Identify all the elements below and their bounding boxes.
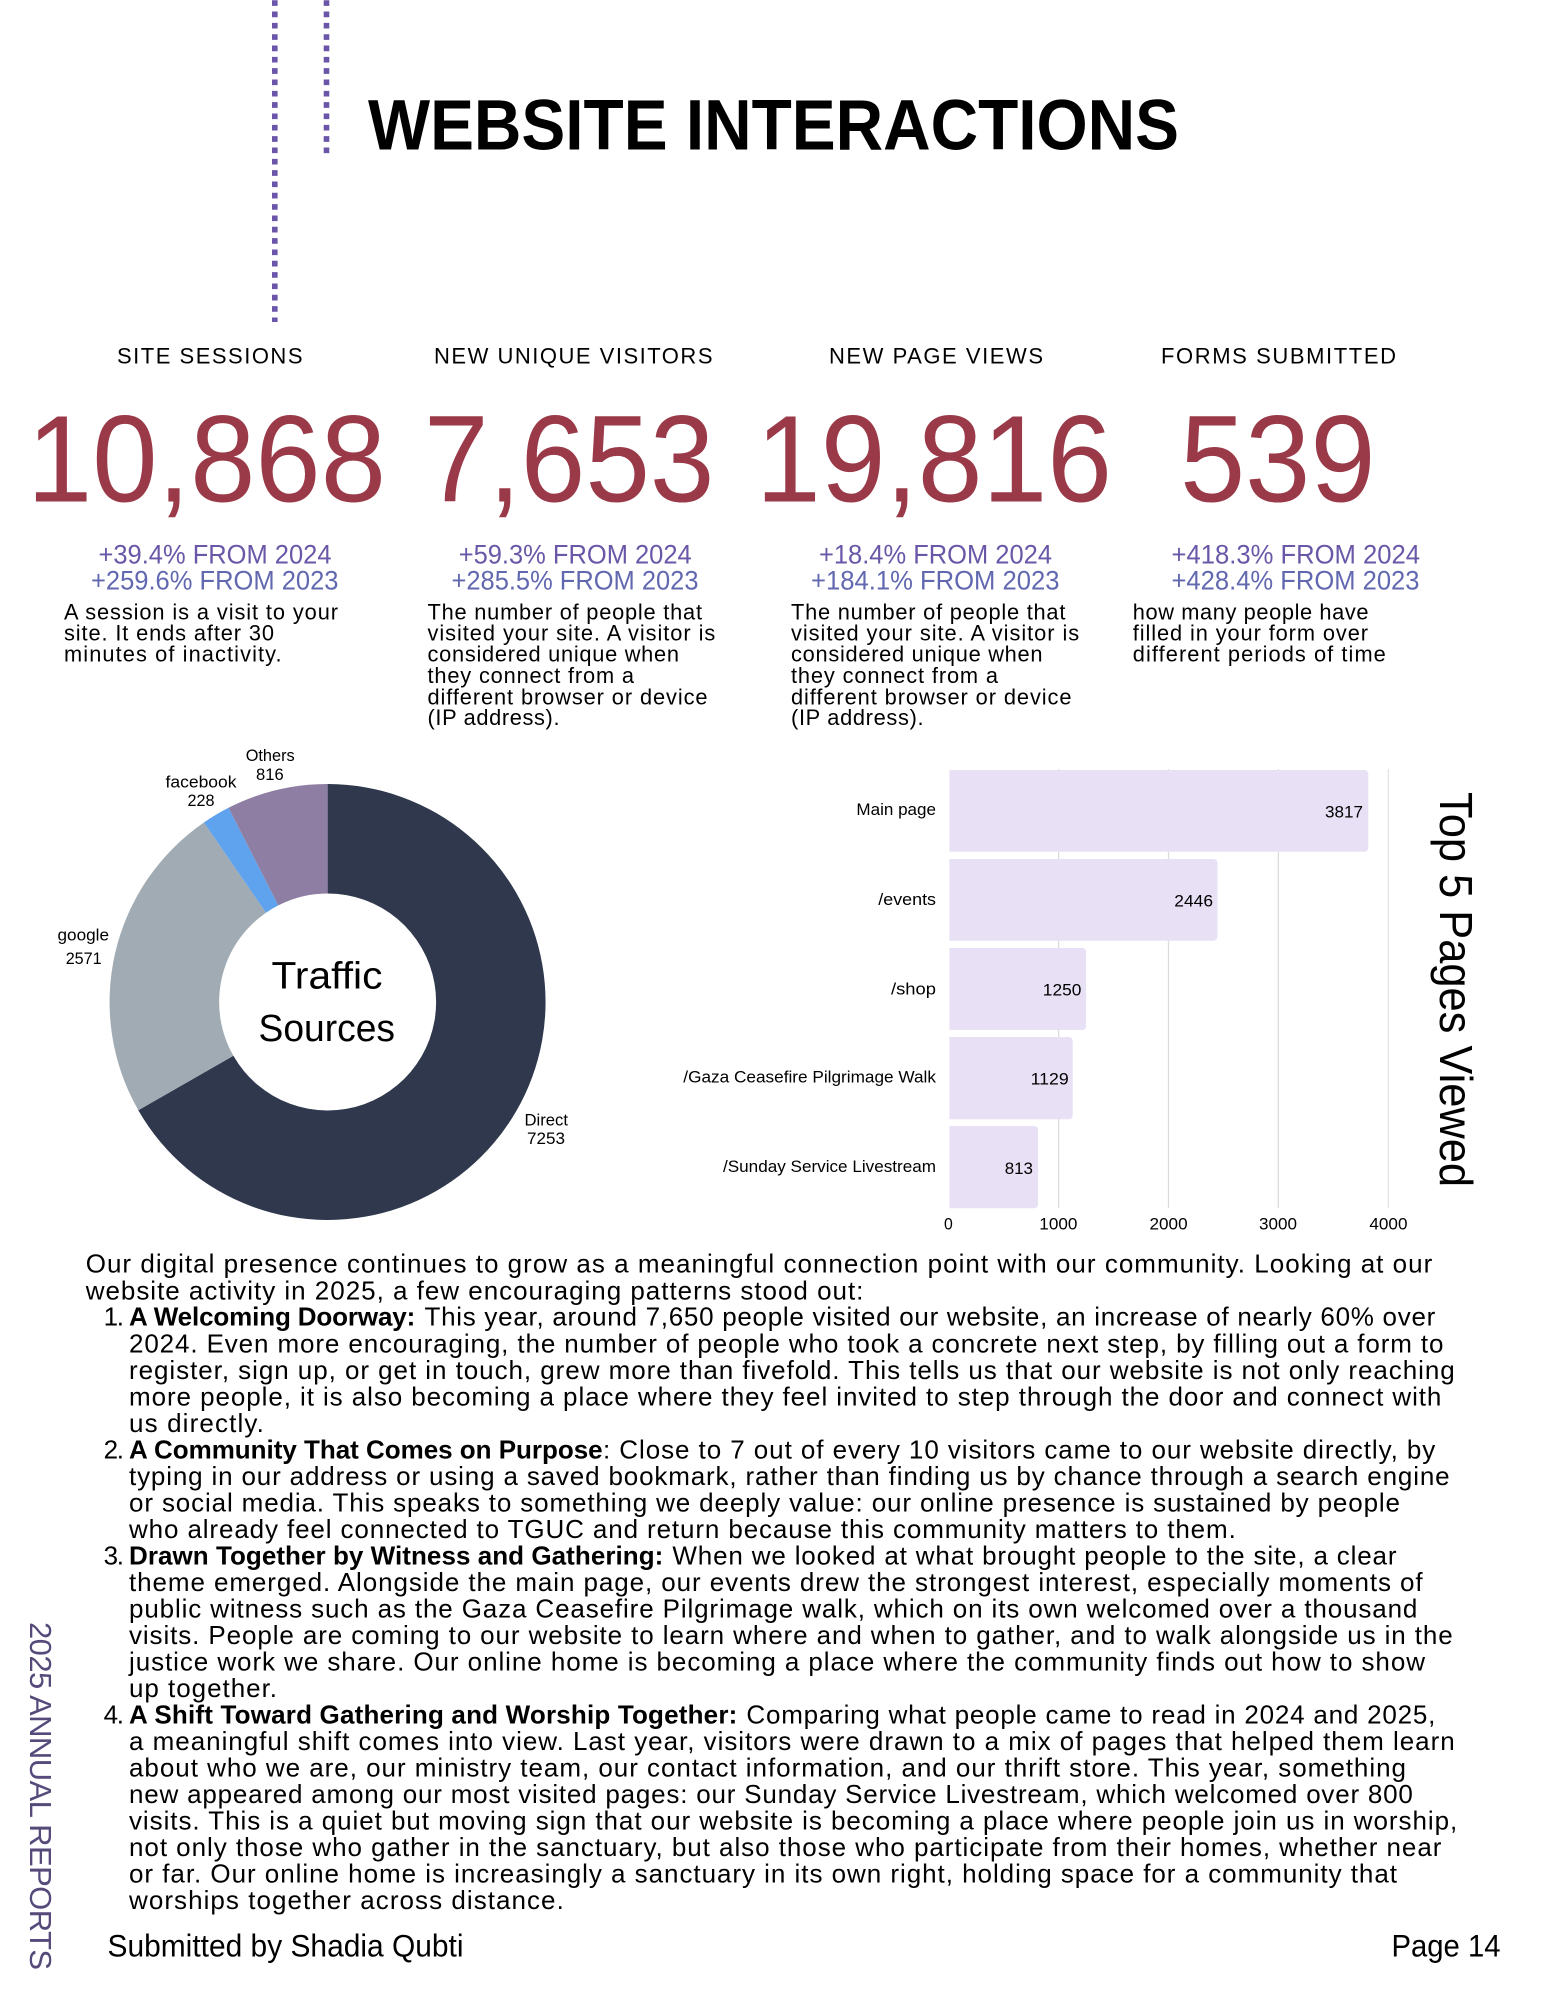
donut centre title: Sources	[258, 1008, 395, 1050]
side label: rotated report title: 2025 ANNUAL REPORTS	[23, 1622, 58, 1970]
description: A session is a visit to your	[64, 600, 338, 624]
list item 2: typing in our address or using a saved bookmark, rather than finding us by chance through a search engine	[129, 1461, 1450, 1491]
list item 3: visits. People are coming to our website to learn where and when to gather, and to walk alongside us in the	[129, 1620, 1453, 1650]
description: considered unique when	[791, 642, 1042, 667]
description	[428, 600, 715, 730]
list item 4: worships together across distance.	[128, 1885, 564, 1915]
list item 1	[104, 1302, 1455, 1438]
list item 1: more people, it is also becoming a place where they feel invited to step through the door and connect with	[129, 1381, 1441, 1411]
label: google: google	[58, 926, 109, 945]
category labels: Main page	[856, 800, 936, 819]
label: Others: Others	[246, 746, 295, 765]
slices	[110, 784, 546, 1220]
list item 4: not only those who gather in the sanctuary, but also those who participate from their homes, whether near	[129, 1832, 1442, 1862]
description: minutes of inactivity.	[64, 642, 282, 667]
list item 3	[104, 1540, 1453, 1703]
x axis labels: 3000	[1259, 1214, 1297, 1233]
label: facebook	[166, 772, 237, 810]
donut centre title	[258, 955, 395, 1050]
change from 2023: +259.6% FROM 2023	[91, 565, 338, 595]
list item 1: 1.	[104, 1302, 124, 1332]
description: different browser or device	[791, 684, 1072, 709]
description: site. It ends after 30	[64, 620, 274, 646]
list item 4	[104, 1699, 1457, 1915]
bar values: 1250	[1043, 981, 1081, 1000]
bar values: 3817	[1325, 803, 1363, 822]
list item 4: or far. Our online home is increasingly a sanctuary in its own right, holding space for a community that	[129, 1858, 1398, 1888]
list item 2: : Close to 7 out of every 10 visitors came to our website directly, by	[603, 1434, 1435, 1464]
footer: submitted by: Submitted by Shadia Qubti	[108, 1927, 464, 1963]
list item 3: When we looked at what brought people to the site, a clear	[672, 1540, 1397, 1570]
description: visited your site. A visitor is	[791, 620, 1079, 646]
label: google	[58, 926, 109, 968]
list item 4: 4.	[104, 1699, 124, 1729]
bar: /shop	[949, 948, 1086, 1030]
label: Direct	[524, 1110, 568, 1148]
dotted accent line: long	[272, 0, 278, 322]
label: google: 2571	[66, 949, 102, 968]
bar values: 813	[1005, 1159, 1033, 1178]
category labels	[683, 800, 936, 1176]
body text: intro	[85, 1249, 1433, 1305]
list item 4: new appeared among our most visited pages: our Sunday Service Livestream, which welcomed over 800	[129, 1779, 1413, 1809]
x axis labels: 2000	[1150, 1214, 1188, 1233]
bar values: 1129	[1031, 1069, 1069, 1088]
description: The number of people that	[428, 600, 702, 624]
category labels: /Sunday Service Livestream	[723, 1157, 936, 1176]
description	[1133, 600, 1386, 667]
label: facebook: 228	[188, 791, 214, 810]
x axis labels	[944, 1214, 1408, 1233]
stat label: SITE SESSIONS	[117, 343, 302, 368]
footer: page number: Page 14	[1392, 1927, 1500, 1963]
bar: /Sunday Service Livestream	[949, 1126, 1038, 1208]
x axis labels: 1000	[1039, 1214, 1077, 1233]
list item 4: visits. This is a quiet but moving sign that our website is becoming a place where people join us in worship,	[129, 1805, 1457, 1835]
category labels: /events	[878, 890, 936, 909]
list item 3: 3.	[104, 1540, 124, 1570]
stat number: 10,868	[27, 391, 386, 528]
description: (IP address).	[428, 705, 560, 730]
list item 1: 2024. Even more encouraging, the number of people who took a concrete next step, by filling out a form to	[129, 1328, 1444, 1358]
bar: /Gaza Ceasefire Pilgrimage Walk	[949, 1037, 1073, 1119]
bar chart: top 5 pages viewed	[683, 769, 1408, 1233]
panel: site sessions stat	[27, 343, 386, 667]
stat label: NEW UNIQUE VISITORS	[434, 343, 712, 368]
panel: new unique visitors stat	[424, 343, 715, 730]
list item 2	[104, 1434, 1450, 1544]
label: Others: 816	[256, 765, 284, 784]
change from 2024: +39.4% FROM 2024	[98, 540, 332, 570]
description	[791, 600, 1079, 730]
list item 3: Drawn Together by Witness and Gathering:	[129, 1540, 663, 1570]
list item 4: about who we are, our ministry team, our contact information, and our thrift store. This year, something	[129, 1752, 1406, 1782]
description: they connect from a	[791, 663, 999, 688]
category labels: /Gaza Ceasefire Pilgrimage Walk	[683, 1068, 936, 1087]
list item 3: up together.	[129, 1673, 277, 1703]
description: how many people have	[1133, 600, 1368, 624]
label: Direct: Direct	[524, 1110, 568, 1129]
bar: /events	[949, 859, 1218, 941]
bar values	[1005, 803, 1363, 1178]
list item 1: register, sign up, or get in touch, grew more than fivefold. This tells us that our website is not only reaching	[129, 1355, 1455, 1385]
change from 2023: +285.5% FROM 2023	[452, 565, 698, 595]
donut centre title: Traffic	[272, 955, 382, 997]
list item 1: us directly.	[129, 1408, 264, 1438]
body text: intro: website activity in 2025, a few encouraging patterns stood out:	[85, 1275, 863, 1305]
change from 2024: +59.3% FROM 2024	[459, 540, 692, 570]
dotted accent line: short	[324, 0, 329, 153]
label: Others	[246, 746, 295, 784]
list item 3: theme emerged. Alongside the main page, our events drew the strongest interest, especially moments of	[129, 1567, 1423, 1597]
description: considered unique when	[428, 642, 679, 667]
description	[64, 600, 338, 667]
list item 1: A Welcoming Doorway:	[129, 1302, 415, 1332]
description: different browser or device	[428, 684, 708, 709]
stat number: 539	[1180, 391, 1376, 528]
panel: forms submitted stat	[1133, 343, 1420, 667]
list item 4: a meaningful shift comes into view. Last year, visitors were drawn to a mix of pages that helped them learn	[129, 1726, 1455, 1756]
description: (IP address).	[791, 705, 924, 730]
stat number: 7,653	[424, 391, 714, 528]
description: they connect from a	[428, 663, 635, 688]
body text: intro: Our digital presence continues to grow as a meaningful connection point with our community. Looking at our	[86, 1249, 1433, 1279]
donut chart: traffic sources	[58, 746, 568, 1220]
change from 2023: +184.1% FROM 2023	[811, 565, 1060, 595]
x axis labels: 0	[944, 1214, 953, 1233]
x axis labels: 4000	[1369, 1214, 1408, 1233]
panel: new page views stat	[756, 343, 1112, 730]
stat label: FORMS SUBMITTED	[1161, 343, 1396, 368]
title: WEBSITE INTERACTIONS	[368, 86, 1179, 165]
list item 2: 2.	[104, 1434, 124, 1464]
description: different periods of time	[1133, 642, 1386, 667]
description: The number of people that	[791, 600, 1065, 624]
label: facebook: facebook	[166, 772, 237, 791]
list item 2: A Community That Comes on Purpose	[129, 1434, 603, 1464]
list item 3: public witness such as the Gaza Ceasefire Pilgrimage walk, which on its own welcomed over a thousand	[129, 1593, 1417, 1623]
change from 2024: +18.4% FROM 2024	[819, 540, 1052, 570]
list item 4: Comparing what people came to read in 2024 and 2025,	[746, 1699, 1435, 1729]
list item 1: This year, around 7,650 people visited our website, an increase of nearly 60% over	[424, 1302, 1436, 1332]
stat label: NEW PAGE VIEWS	[829, 343, 1043, 368]
change from 2023: +428.4% FROM 2023	[1172, 565, 1420, 595]
bar values: 2446	[1174, 892, 1213, 911]
change from 2024: +418.3% FROM 2024	[1172, 540, 1420, 570]
stat number: 19,816	[756, 391, 1112, 528]
description: filled in your form over	[1133, 620, 1368, 646]
list item 3: justice work we share. Our online home is becoming a place where the community finds out how to show	[128, 1646, 1425, 1676]
list item 2: who already feel connected to TGUC and return because this community matters to them.	[128, 1514, 1236, 1544]
list item 4: A Shift Toward Gathering and Worship Together:	[129, 1699, 737, 1729]
label: Direct: 7253	[527, 1129, 565, 1148]
bar: Main page	[949, 770, 1368, 852]
list item 2: or social media. This speaks to something we deeply value: our online presence is sustained by people	[129, 1487, 1400, 1517]
chart title: rotated: Top 5 Pages Viewed	[1430, 792, 1482, 1187]
category labels: /shop	[891, 979, 936, 998]
description: visited your site. A visitor is	[428, 620, 715, 646]
